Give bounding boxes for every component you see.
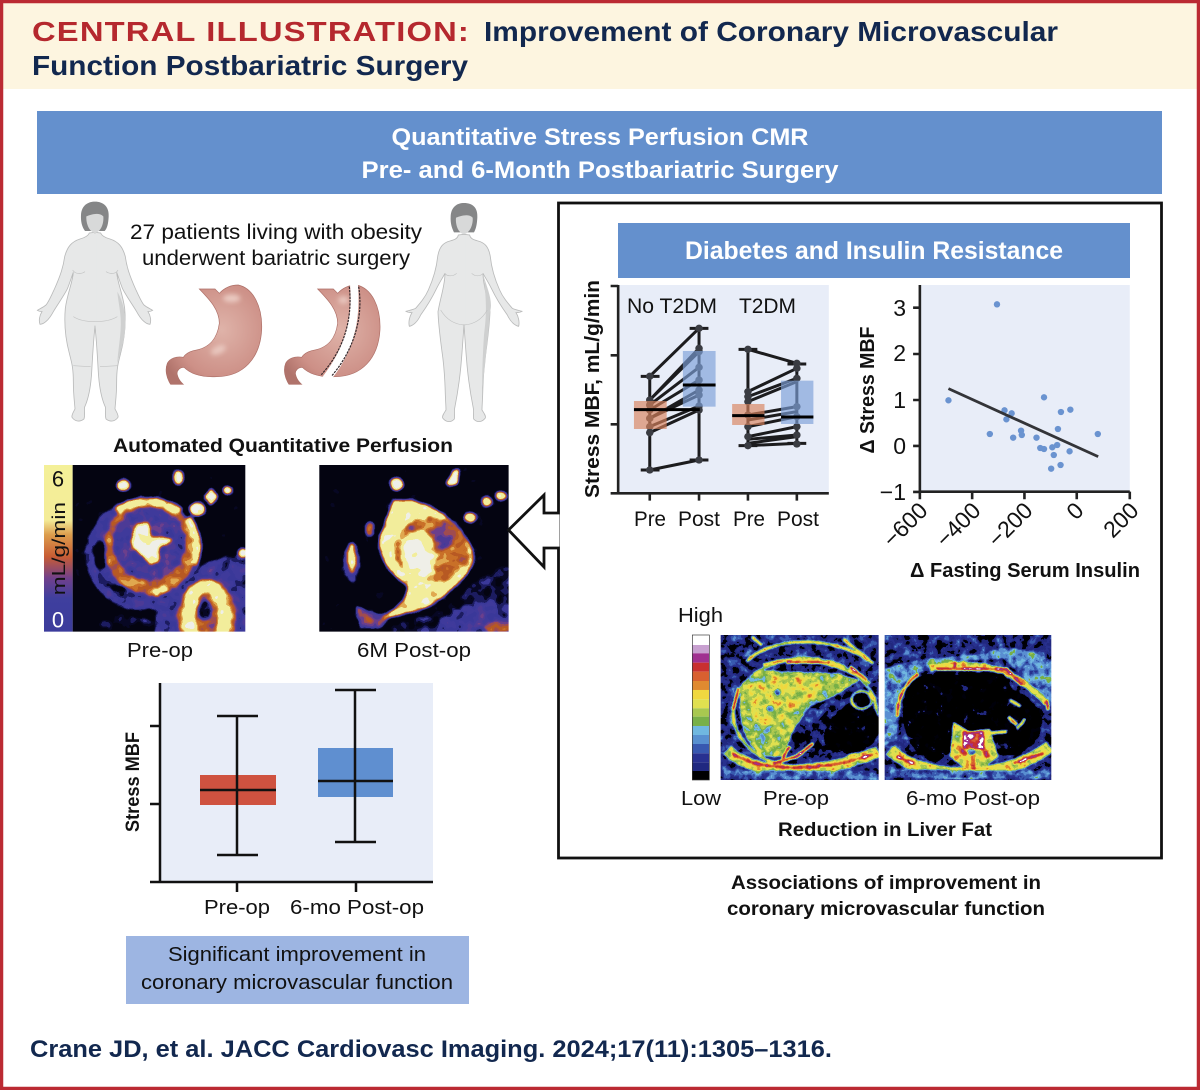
perfusion colour scale: 6	[52, 467, 64, 492]
liver fat colour scale	[678, 605, 723, 810]
chart: change in stress MBF vs fasting insulin: 3	[893, 295, 906, 321]
title banner	[0, 0, 1200, 89]
callout: significant improvement: coronary microvascular function	[141, 972, 453, 994]
patient cohort text: underwent bariatric surgery	[142, 247, 411, 270]
chart: stress MBF by diabetes status: Pre	[733, 508, 765, 531]
perfusion map captions	[127, 640, 471, 662]
liver MRI: pre-op	[720, 635, 879, 780]
chart: change in stress MBF vs fasting insulin: Δ Fasting Serum Insulin	[910, 560, 1140, 582]
icon: stomach after sleeve gastrectomy	[284, 284, 380, 384]
title banner: CENTRAL ILLUSTRATION:	[32, 16, 470, 47]
chart: change in stress MBF vs fasting insulin: 200	[1098, 497, 1144, 543]
chart: stress MBF by diabetes status: No T2DM	[627, 295, 717, 318]
chart: change in stress MBF vs fasting insulin: 1	[893, 387, 906, 413]
liver MRI captions: Pre-op	[763, 788, 829, 810]
title banner: Improvement of Coronary Microvascular	[484, 16, 1058, 47]
chart: change in stress MBF vs fasting insulin: −400	[931, 497, 986, 552]
chart: stress MBF by diabetes status: Post	[678, 508, 720, 531]
perfusion colour scale: mL/g/min	[48, 502, 69, 595]
heading: diabetes and insulin resistance: Diabetes and Insulin Resistance	[685, 237, 1063, 265]
liver MRI: 6 months post-op	[884, 635, 1052, 780]
header band: quantitative stress perfusion CMR: Pre- and 6-Month Postbariatric Surgery	[362, 157, 839, 184]
chart: stress MBF by diabetes status	[582, 280, 829, 531]
icon: patient after surgery	[406, 203, 522, 422]
header band: quantitative stress perfusion CMR: Quantitative Stress Perfusion CMR	[392, 124, 808, 151]
box plot: stress MBF pre-op vs post-op	[123, 683, 433, 919]
liver MRI captions: 6-mo Post-op	[906, 788, 1040, 810]
liver MRI captions	[763, 788, 1040, 810]
chart: change in stress MBF vs fasting insulin: −200	[983, 497, 1038, 552]
caption: associations of improvement	[727, 873, 1045, 920]
callout: significant improvement: Significant improvement in	[168, 944, 426, 966]
perfusion colour scale: 0	[52, 608, 64, 633]
perfusion map captions: 6M Post-op	[357, 640, 471, 662]
chart: stress MBF by diabetes status: Post	[777, 508, 819, 531]
chart: stress MBF by diabetes status: T2DM	[739, 295, 796, 318]
header band: quantitative stress perfusion CMR	[37, 111, 1162, 194]
box plot: stress MBF pre-op vs post-op: Pre-op	[204, 897, 270, 919]
patient cohort text: 27 patients living with obesity	[130, 221, 423, 244]
chart: change in stress MBF vs fasting insulin: 0	[893, 433, 906, 459]
arrow: associations to perfusion	[508, 495, 560, 567]
patient cohort text	[130, 221, 423, 270]
caption: associations of improvement: coronary microvascular function	[727, 899, 1045, 920]
box plot: stress MBF pre-op vs post-op: 6-mo Post-op	[290, 897, 424, 919]
icon: stomach before surgery	[166, 285, 262, 384]
chart: stress MBF by diabetes status: Pre	[634, 508, 666, 531]
liver fat colour scale: Low	[681, 788, 722, 810]
chart: change in stress MBF vs fasting insulin: −1	[880, 479, 906, 505]
icon: patient before surgery	[37, 202, 153, 421]
chart: change in stress MBF vs fasting insulin: 2	[893, 340, 906, 366]
citation: Crane JD, et al. JACC Cardiovasc Imaging. 2024;17(11):1305–1316.	[30, 1036, 832, 1063]
perfusion map captions: Pre-op	[127, 640, 193, 662]
heading: reduction in liver fat: Reduction in Liver Fat	[778, 820, 993, 841]
panel: associations box	[558, 203, 1162, 858]
chart: change in stress MBF vs fasting insulin: Δ Stress MBF	[857, 326, 879, 454]
perfusion map: 6 months post-op	[319, 465, 509, 632]
liver fat colour scale: High	[678, 605, 723, 627]
chart: change in stress MBF vs fasting insulin: −600	[878, 497, 933, 552]
caption: associations of improvement: Associations of improvement in	[731, 873, 1041, 894]
heading: automated quantitative perfusion: Automated Quantitative Perfusion	[113, 436, 453, 457]
title banner: Function Postbariatric Surgery	[32, 50, 468, 81]
perfusion map: pre-op	[72, 465, 246, 632]
heading: diabetes and insulin resistance	[618, 223, 1130, 278]
callout: significant improvement	[126, 936, 469, 1004]
chart: change in stress MBF vs fasting insulin: 0	[1061, 497, 1089, 525]
box plot: stress MBF pre-op vs post-op: Stress MBF	[123, 732, 144, 832]
perfusion colour scale	[44, 465, 73, 633]
chart: change in stress MBF vs fasting insulin	[857, 285, 1144, 582]
chart: stress MBF by diabetes status: Stress MBF, mL/g/min	[582, 280, 604, 498]
